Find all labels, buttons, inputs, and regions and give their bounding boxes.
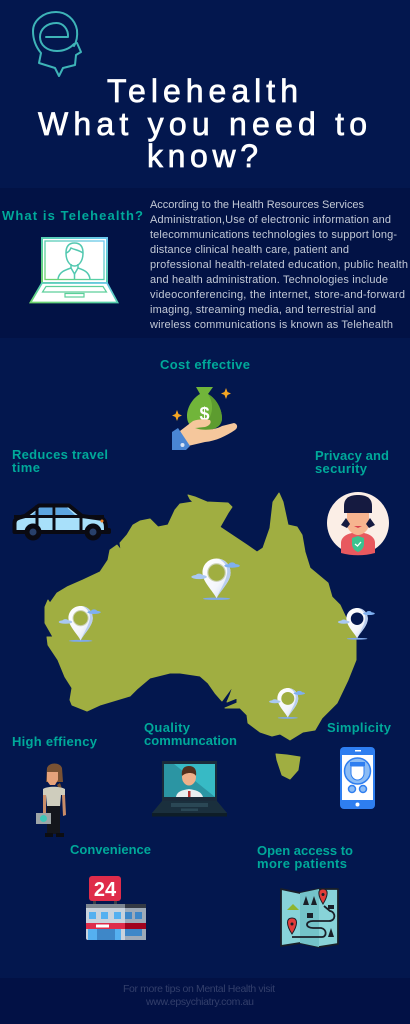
icon: money bag in hand [172, 387, 237, 450]
title: Telehealth [107, 73, 298, 109]
text block: telehealth definition: telecommunications technologies to support long- [150, 229, 397, 241]
title: What you need to [38, 106, 367, 142]
label: open access to more patients: Open access to [257, 843, 353, 858]
icon: money bag in hand: $ [199, 404, 210, 424]
text block: telehealth definition: According to the Health Resources Services [150, 199, 364, 211]
icon: south-east location pin [269, 688, 305, 719]
title: know? [147, 138, 258, 174]
footer text [123, 983, 275, 1008]
icon: doctor on laptop [152, 761, 227, 816]
text block: telehealth definition: professional health-related education, public health [150, 259, 408, 271]
label: cost effective: Cost effective [160, 357, 250, 372]
text block: telehealth definition: videoconferencing, the internet, store-and-forward [150, 289, 405, 301]
text block: telehealth definition: Administration,Use of electronic information and [150, 214, 391, 226]
text block: telehealth definition: imaging, streaming media, and terrestrial and [150, 304, 376, 316]
label: privacy and security: security [315, 461, 368, 476]
text block: telehealth definition [149, 199, 408, 331]
icon: west location pin [59, 606, 101, 642]
label: reduces travel time: Reduces travel [12, 447, 108, 462]
label: quality communcation: Quality [144, 720, 191, 735]
map: Tasmania [276, 754, 300, 779]
label: open access to more patients: more patients [257, 856, 347, 871]
label: quality communcation: communcation [144, 733, 237, 748]
panel: what is telehealth band [0, 188, 410, 338]
text block: telehealth definition: and health administration. Technologies include [150, 274, 388, 286]
icon: 24 hour store: 24 [94, 879, 117, 901]
label: convenience: Convenience [70, 842, 151, 857]
icon: telehealth laptop [30, 238, 118, 302]
icon: car [14, 505, 109, 540]
text block: telehealth definition: wireless communications is known as Telehealth [149, 319, 393, 331]
footer text: For more tips on Mental Health visit [123, 983, 275, 995]
label: reduces travel time: time [12, 460, 40, 475]
label: open access to more patients [257, 843, 353, 871]
label: reduces travel time [12, 447, 108, 475]
icon: central location pin [191, 558, 240, 600]
icon: woman with shield [327, 492, 389, 555]
label: high effiency: High effiency [12, 734, 98, 749]
title [38, 73, 367, 174]
icon: e head logo [33, 12, 81, 76]
label: privacy and security [315, 448, 389, 476]
footer text: www.epsychiatry.com.au [145, 996, 254, 1008]
label: quality communcation [144, 720, 237, 748]
label: simplicity: Simplicity [327, 720, 392, 735]
label: privacy and security: Privacy and [315, 448, 389, 463]
icon: east location pin [338, 608, 375, 640]
text block: telehealth definition: distance clinical health care, patient and [150, 244, 349, 256]
map of Australia [45, 493, 356, 779]
icon: nurse with medical case [36, 764, 66, 837]
icon: 24 hour store [86, 876, 146, 940]
icon: folded route map [281, 889, 338, 947]
icon: smartphone with doctor [340, 747, 375, 809]
panel: footer band [0, 978, 410, 1024]
heading: what is telehealth: What is Telehealth? [2, 208, 143, 223]
